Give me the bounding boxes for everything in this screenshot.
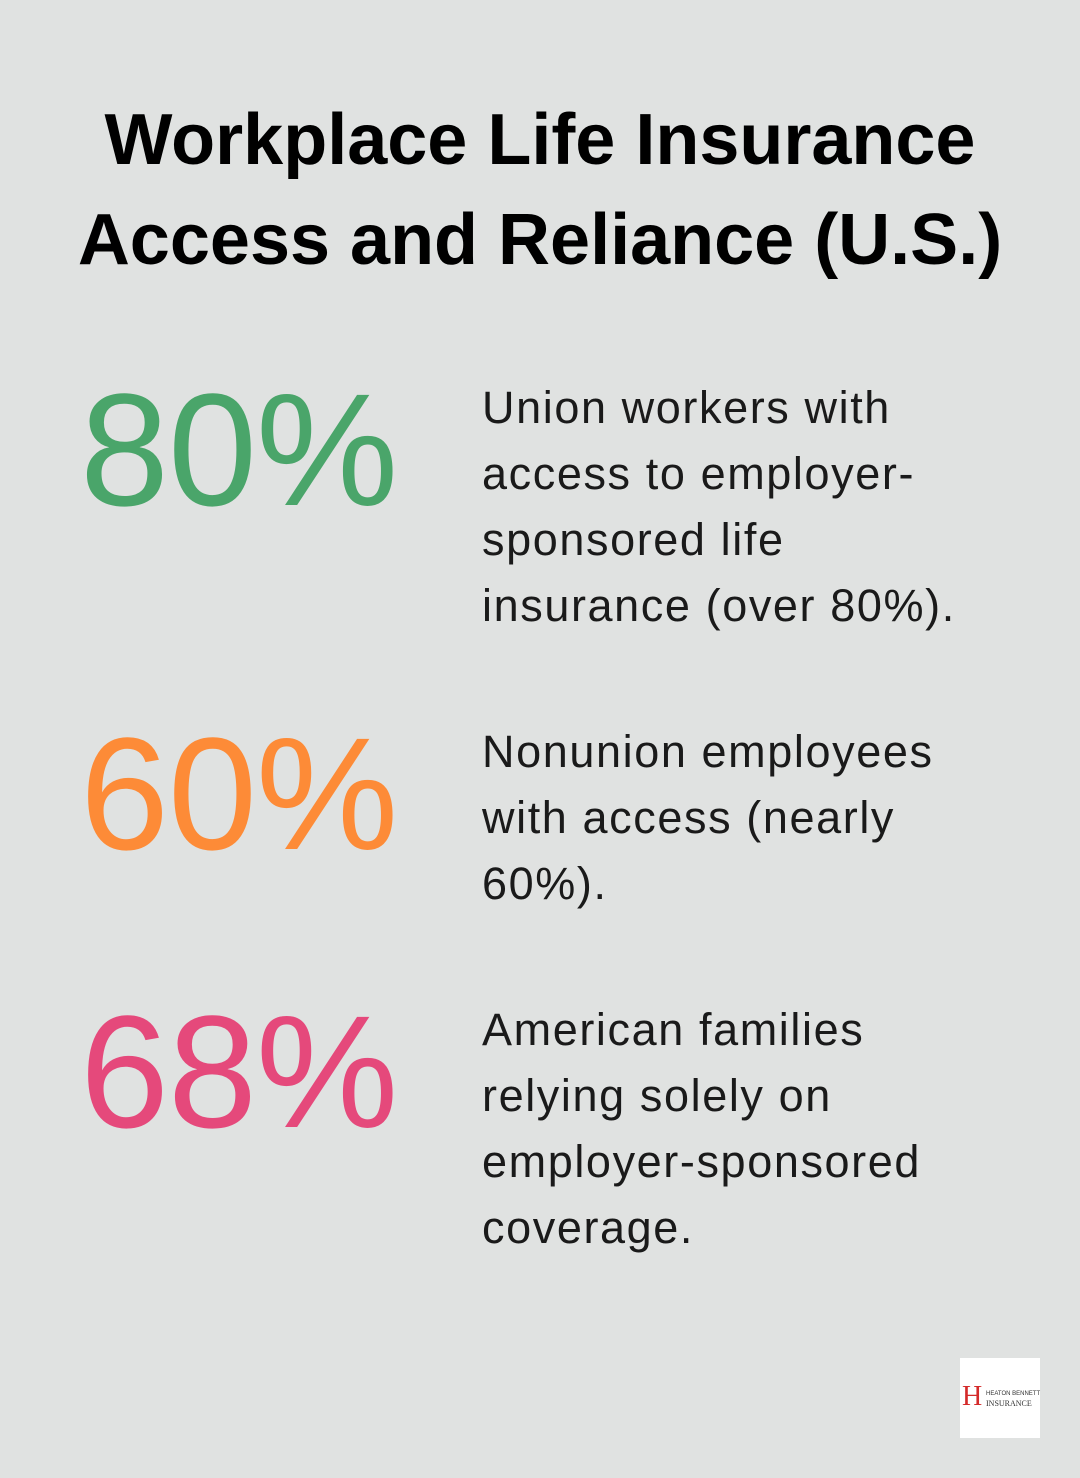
title: Workplace Life Insurance bbox=[105, 100, 975, 180]
stat: 80%: 80% bbox=[80, 360, 397, 539]
logo: HEATON BENNETT bbox=[986, 1391, 1040, 1397]
text: nonunion: Nonunion employees bbox=[482, 726, 934, 777]
logo: INSURANCE bbox=[986, 1399, 1032, 1408]
title: Access and Reliance (U.S.) bbox=[78, 200, 1002, 280]
text: families bbox=[482, 1004, 921, 1253]
text: families: relying solely on bbox=[482, 1070, 832, 1121]
text: nonunion: 60%). bbox=[482, 858, 608, 909]
text: nonunion: with access (nearly bbox=[482, 792, 895, 843]
text: families: coverage. bbox=[482, 1202, 694, 1253]
logo bbox=[960, 1358, 1040, 1438]
stat: 60%: 60% bbox=[80, 704, 397, 883]
stat: 68%: 68% bbox=[80, 982, 397, 1161]
text: union workers: Union workers with bbox=[482, 382, 891, 433]
text: families: American families bbox=[482, 1004, 864, 1055]
text: nonunion bbox=[482, 726, 934, 909]
logo: H bbox=[962, 1381, 982, 1412]
text: union workers bbox=[482, 382, 956, 631]
title bbox=[78, 100, 1002, 280]
text: union workers: insurance (over 80%). bbox=[482, 580, 956, 631]
text: union workers: access to employer- bbox=[482, 448, 915, 499]
text: families: employer-sponsored bbox=[482, 1136, 921, 1187]
text: union workers: sponsored life bbox=[482, 514, 785, 565]
